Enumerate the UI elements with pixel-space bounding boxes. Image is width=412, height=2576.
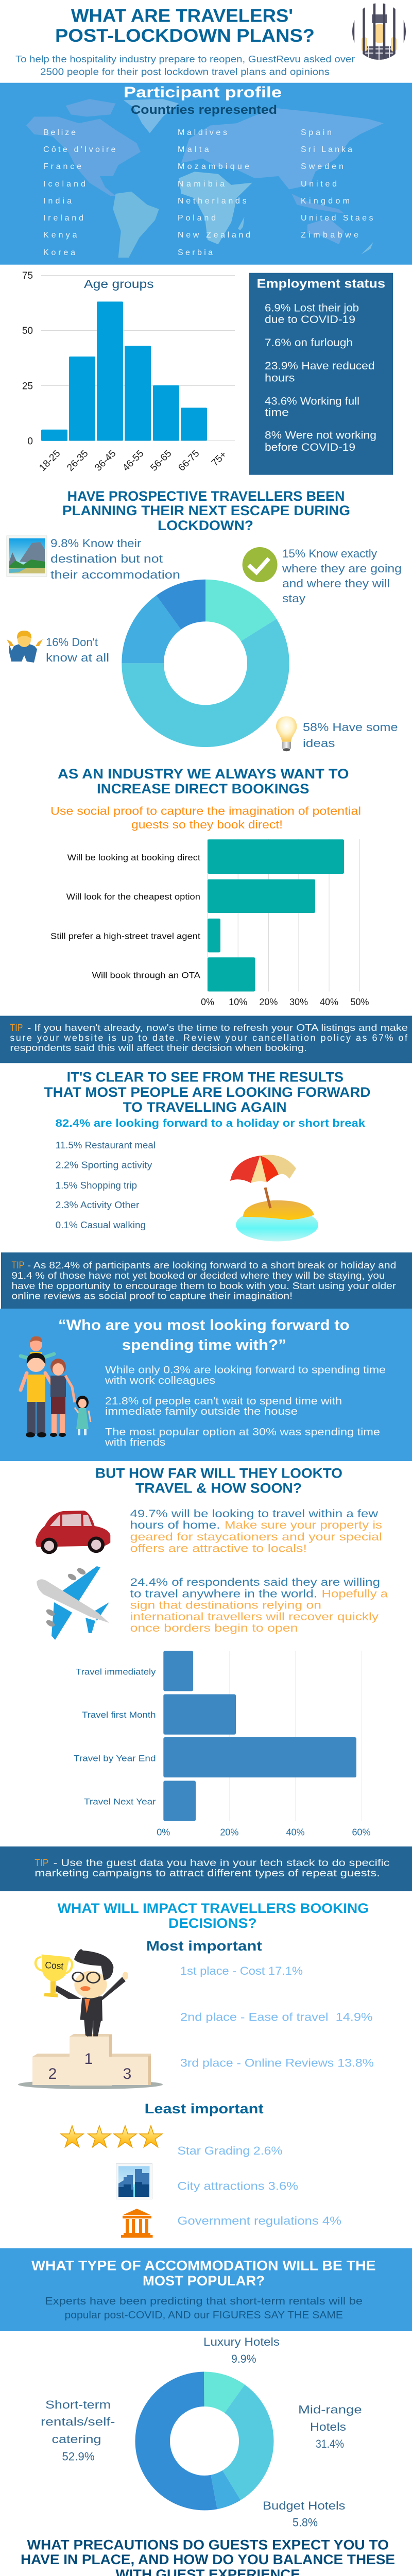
text: government regulations: Government regulations 4% [177,2214,341,2227]
panel: accommodation heading band: MOST POPULAR? [143,2273,265,2289]
panel: tip 1 [0,1016,412,1063]
heading: how far and how soon [95,1465,342,1496]
panel: tip 3: marketing campaigns to attract different types of repeat guests. [35,1868,380,1879]
bar chart: when will they travel: Travel Next Year [84,1797,156,1806]
text: 49.7% within a few hours: hours of home. [130,1519,220,1531]
text: who: with work colleagues [105,1375,215,1386]
heading: planning next escape [62,488,350,533]
bar chart: age groups: 50 [22,326,33,336]
label: budget hotels: 5.8% [293,2516,318,2529]
country list: Mozambique [178,162,249,171]
text: city attractions: City attractions 3.6% [177,2180,298,2193]
illustration: winner on podium with trophy: Cost [45,1960,64,1972]
panel: employment status: 43.6% Working full [265,395,359,407]
country list: United Staes [301,214,373,223]
heading: planning next escape: PLANNING THEIR NEXT ESCAPE DURING [62,503,350,518]
text: 58% have some ideas: 58% Have some [303,721,398,734]
country list: Kenya [43,231,77,240]
panel: tip 2: TIP [11,1260,24,1271]
bar chart: booking intent: 0% [201,997,214,1007]
text: 16% don't know: know at all [46,651,109,664]
label: short-term rentals: catering [52,2433,101,2446]
panel: tip 1: sure your website is up to date. Review your cancellation policy as 67% of [10,1032,408,1043]
text: 24.4% anywhere in the world: once borders begin to open [130,1622,298,1634]
icon: landscape picture [7,536,47,577]
label: mid-range hotels: 31.4% [316,2437,344,2450]
world map [26,99,384,258]
text: star grading: Star Grading 2.6% [177,2144,282,2157]
icon: red car [36,1511,110,1554]
text: 16% don't know [46,636,109,664]
text: who: 21.8% of people can't wait to spend time with [105,1396,342,1407]
country list: Kingdom [301,197,350,206]
title: POST-LOCKDOWN PLANS? [55,26,315,46]
heading: direct bookings: AS AN INDUSTRY WE ALWAYS WANT TO [58,766,349,782]
label: short-term rentals [41,2398,115,2463]
bar chart: booking intent: Will be looking at booking direct [67,853,200,862]
bar chart: age groups: 46-55 [121,448,146,473]
heading: how far and how soon: TRAVEL & HOW SOON? [135,1481,302,1496]
list: other activities: 0.1% Casual walking [56,1220,146,1230]
country list: Maldives [178,128,227,137]
text: 24.4% anywhere in the world: sign that destinations relying on [130,1600,321,1612]
bar chart: age groups: 66-75 [176,448,202,473]
bar chart: when will they travel: 0% [157,1827,170,1837]
donut chart: planning [143,601,268,726]
country list: Netherlands [178,197,247,206]
intro text: 2500 people for their post lockdown travel plans and opinions [40,66,330,77]
heading: planning next escape: HAVE PROSPECTIVE TRAVELLERS BEEN [67,488,345,504]
panel: accommodation heading band: popular post-COVID, AND our FIGURES SAY THE SAME [65,2310,343,2321]
bar chart: age groups: Age groups [84,277,153,291]
panel: tip 2: have the opportunity to encourage them to book with you. Start using your older [11,1281,396,1291]
panel: tip 1: - If you haven't already, now's the time to refresh your OTA listings and make [27,1023,408,1033]
list: other activities: 11.5% Restaurant meal [56,1140,156,1150]
label: mid-range hotels [298,2403,362,2450]
panel: employment status: 7.6% on furlough [265,337,353,349]
heading: participant profile: Participant profile [124,84,282,101]
intro text [15,54,355,77]
illustration: family [21,1336,91,1437]
subheading: 82.4% holiday: 82.4% are looking forward to a holiday or short break [56,1117,365,1129]
bar chart: age groups: 26-35 [65,448,91,473]
bar chart: booking intent: 50% [350,997,369,1007]
panel: accommodation heading band [0,2248,412,2331]
bar chart: when will they travel: Travel immediately [76,1667,156,1676]
country list: Zimbabwe [301,231,358,240]
illustration: winner on podium with trophy [18,1949,163,2089]
heading: looking forward to travelling: THAT MOST PEOPLE ARE LOOKING FORWARD [44,1084,370,1100]
text: 15% know exactly: where they are going [282,562,402,575]
panel: employment status: due to COVID-19 [265,314,355,326]
heading: looking forward to travelling [44,1070,370,1115]
subheading: least important: Least important [145,2101,264,2116]
bar chart: age groups: 36-45 [93,448,118,473]
text: 15% know exactly: 15% Know exactly [282,547,377,560]
text: 15% know exactly: and where they will [282,577,390,590]
text: 15% know exactly [282,547,402,605]
country list: Sri Lanka [301,145,352,154]
label: mid-range hotels: Hotels [310,2420,346,2433]
country list: Iceland [43,180,85,189]
text: 24.4% anywhere in the world: international travellers will recover quickly [130,1611,379,1623]
heading: how far and how soon: BUT HOW FAR WILL THEY LOOKTO [95,1465,342,1481]
label: budget hotels: Budget Hotels [263,2499,345,2512]
heading: precautions: WHAT PRECAUTIONS DO GUESTS EXPECT YOU TO [27,2537,389,2552]
bar chart: when will they travel: 20% [220,1827,238,1837]
label: luxury hotels: 9.9% [231,2352,256,2365]
text: 9.8% know destination: destination but not [50,552,163,565]
bar chart: when will they travel: Travel first Month [82,1710,156,1720]
subheading: social proof: guests so they book direct! [131,818,283,831]
text: 24.4% anywhere in the world: to travel anywhere in the world. [130,1588,317,1600]
icon: green check [243,547,278,582]
icon: four stars [61,2126,162,2147]
label: luxury hotels [203,2335,280,2365]
subheading: social proof [50,804,361,831]
country list: Côte d'Ivoire [43,145,116,154]
bar chart: booking intent: 20% [259,997,278,1007]
panel: employment status: Employment status [256,277,385,291]
list: other activities: 2.3% Activity Other [56,1200,139,1210]
donut chart: accommodation types [152,2389,256,2493]
illustration: winner on podium with trophy: 1 [84,2050,93,2067]
heading: booking decisions: DECISIONS? [168,1916,256,1931]
heading: who: spending time with?” [122,1337,286,1353]
panel: employment status: 6.9% Lost their job [265,302,359,314]
bar chart: booking intent: 30% [289,997,308,1007]
heading: looking forward to travelling: IT'S CLEAR TO SEE FROM THE RESULTS [67,1070,344,1085]
title [55,6,315,46]
bar chart: booking intent: 40% [320,997,338,1007]
country list [43,128,373,257]
bar chart: age groups: 56-65 [148,448,174,473]
label: short-term rentals: Short-term [45,2398,111,2411]
text: 9.8% know destination [50,537,180,581]
panel: employment status: before COVID-19 [265,442,355,453]
heading: booking decisions [58,1901,369,1931]
country list: Poland [178,214,216,223]
icon: beach island umbrella [230,1155,318,1242]
text: 9.8% know destination: their accommodation [50,568,180,581]
text: 24.4% anywhere in the world: Hopefully a [321,1588,388,1600]
label: mid-range hotels: Mid-range [298,2403,362,2416]
country list: Serbia [178,248,213,257]
bar chart: age groups [22,270,235,473]
panel: participant profile [0,83,412,265]
panel: tip 1: respondents said this will affect their decision when booking. [10,1043,307,1053]
heading: direct bookings [58,766,349,796]
icon: shrugging man [7,631,43,663]
bar chart: when will they travel: Travel by Year End [74,1753,156,1763]
bar chart: age groups: 0 [27,436,33,447]
label: short-term rentals: 52.9% [62,2450,95,2463]
country list: France [43,162,81,171]
panel: tip 2: 91.4 % of those have not yet booked or decided where they will be staying, you [11,1270,385,1281]
list: most important factors [180,1964,374,2069]
bar chart: when will they travel: 60% [352,1827,371,1837]
bar chart: age groups: 75+ [210,449,229,468]
heading: planning next escape: LOCKDOWN? [158,518,253,533]
country list: New Zealand [178,231,250,240]
illustration: winner on podium with trophy: 2 [48,2065,57,2082]
panel: tip 2: - As 82.4% of participants are looking forward to a short break or holiday and [27,1260,396,1270]
heading: booking decisions: WHAT WILL IMPACT TRAVELLERS BOOKING [58,1901,369,1916]
panel: tip 3 [0,1846,412,1891]
list: other activities [56,1140,156,1230]
country list: Sweden [301,162,344,171]
text: 49.7% within a few hours: geared for staycationers and your special [130,1531,382,1543]
country list: United [301,180,337,189]
icon: government building [121,2209,152,2238]
text: 49.7% within a few hours: Make sure your property is [225,1519,382,1531]
bar chart: booking intent: Still prefer a high-street travel agent [50,931,200,941]
heading: precautions: HAVE IN PLACE, AND HOW DO YOU BALANCE THESE [21,2552,395,2567]
bar chart: booking intent: 10% [229,997,247,1007]
panel: tip 3: TIP [35,1858,48,1869]
text: who [105,1364,386,1448]
country list: Spain [301,128,332,137]
bar chart: age groups: 25 [22,381,33,392]
text: 49.7% within a few hours: 49.7% will be looking to travel within a few [130,1508,379,1520]
panel: who are you looking forward to spending time with [0,1309,412,1461]
text: who: While only 0.3% are looking forward to spending time [105,1364,386,1376]
country list: Namibia [178,180,225,189]
list: other activities: 2.2% Sporting activity [56,1160,152,1171]
panel: employment status: time [265,407,289,419]
icon: small light bulb [276,716,297,751]
illustration: winner on podium with trophy: 3 [123,2065,131,2082]
text: 15% know exactly: stay [282,592,305,605]
country list: India [43,197,72,206]
heading: precautions [21,2537,395,2576]
icon: airplane [37,1566,109,1640]
panel: employment status [249,273,393,475]
text: 49.7% within a few hours: offers are attractive to locals! [130,1543,307,1554]
text: who: with friends [105,1437,165,1448]
bar chart: booking intent [50,839,369,1007]
text: who: immediate family outside the house [105,1406,298,1417]
bar chart: when will they travel: 40% [286,1827,305,1837]
bar chart: age groups: 75 [22,270,33,281]
text: 49.7% within a few hours [130,1508,382,1554]
country list: Malta [178,145,209,154]
panel: accommodation heading band: Experts have been predicting that short-term rentals will be [45,2296,363,2307]
subheading: countries represented: Countries represented [131,103,277,117]
text: 58% have some ideas: ideas [303,737,335,750]
text: who: The most popular option at 30% was spending time [105,1427,380,1438]
bar chart: booking intent: Will look for the cheapest option [66,892,200,902]
heading: direct bookings: INCREASE DIRECT BOOKINGS [97,781,309,796]
label: short-term rentals: rentals/self- [41,2415,115,2428]
icon: prisoner behind bars [352,3,406,60]
heading: looking forward to travelling: TO TRAVELLING AGAIN [123,1099,287,1115]
panel: employment status: 8% Were not working [265,430,376,442]
list: most important factors: 2nd place - Ease of travel 14.9% [180,2011,373,2024]
label: budget hotels [263,2499,345,2529]
bar chart: when will they travel [74,1651,371,1837]
list: most important factors: 3rd place - Online Reviews 13.8% [180,2057,374,2069]
title: WHAT ARE TRAVELERS' [71,6,293,26]
panel: accommodation heading band: WHAT TYPE OF ACCOMMODATION WILL BE THE [31,2258,376,2274]
text: 16% don't know: 16% Don't [46,636,98,649]
panel: employment status: hours [265,372,295,384]
panel: tip 2 [1,1252,412,1309]
subheading: social proof: Use social proof to capture the imagination of potential [50,804,361,817]
list: other activities: 1.5% Shopping trip [56,1180,137,1191]
text: 24.4% anywhere in the world: 24.4% of respondents said they are willing [130,1577,380,1588]
text: 24.4% anywhere in the world [130,1577,388,1634]
list: most important factors: 1st place - Cost 17.1% [180,1964,303,1977]
text: 9.8% know destination: 9.8% Know their [50,537,141,550]
subheading: most important: Most important [146,1938,262,1954]
icon: city skyline [116,2164,152,2199]
panel: tip 2: online reviews as social proof to capture their imagination! [11,1291,293,1301]
intro text: To help the hospitality industry prepare to reopen, GuestRevu asked over [15,54,355,64]
panel: employment status: 23.9% Have reduced [265,360,375,372]
panel: tip 1: TIP [10,1023,23,1033]
bar chart: age groups: 18-25 [37,448,63,473]
text: 58% have some ideas [303,721,398,750]
label: luxury hotels: Luxury Hotels [203,2335,280,2348]
country list: Belize [43,128,76,137]
panel: tip 3: - Use the guest data you have in your tech stack to do specific [54,1858,390,1869]
heading: who [58,1317,350,1353]
country list: Ireland [43,214,83,223]
heading: who: “Who are you most looking forward to [58,1317,350,1334]
bar chart: booking intent: Will book through an OTA [92,971,201,980]
country list: Korea [43,248,75,257]
